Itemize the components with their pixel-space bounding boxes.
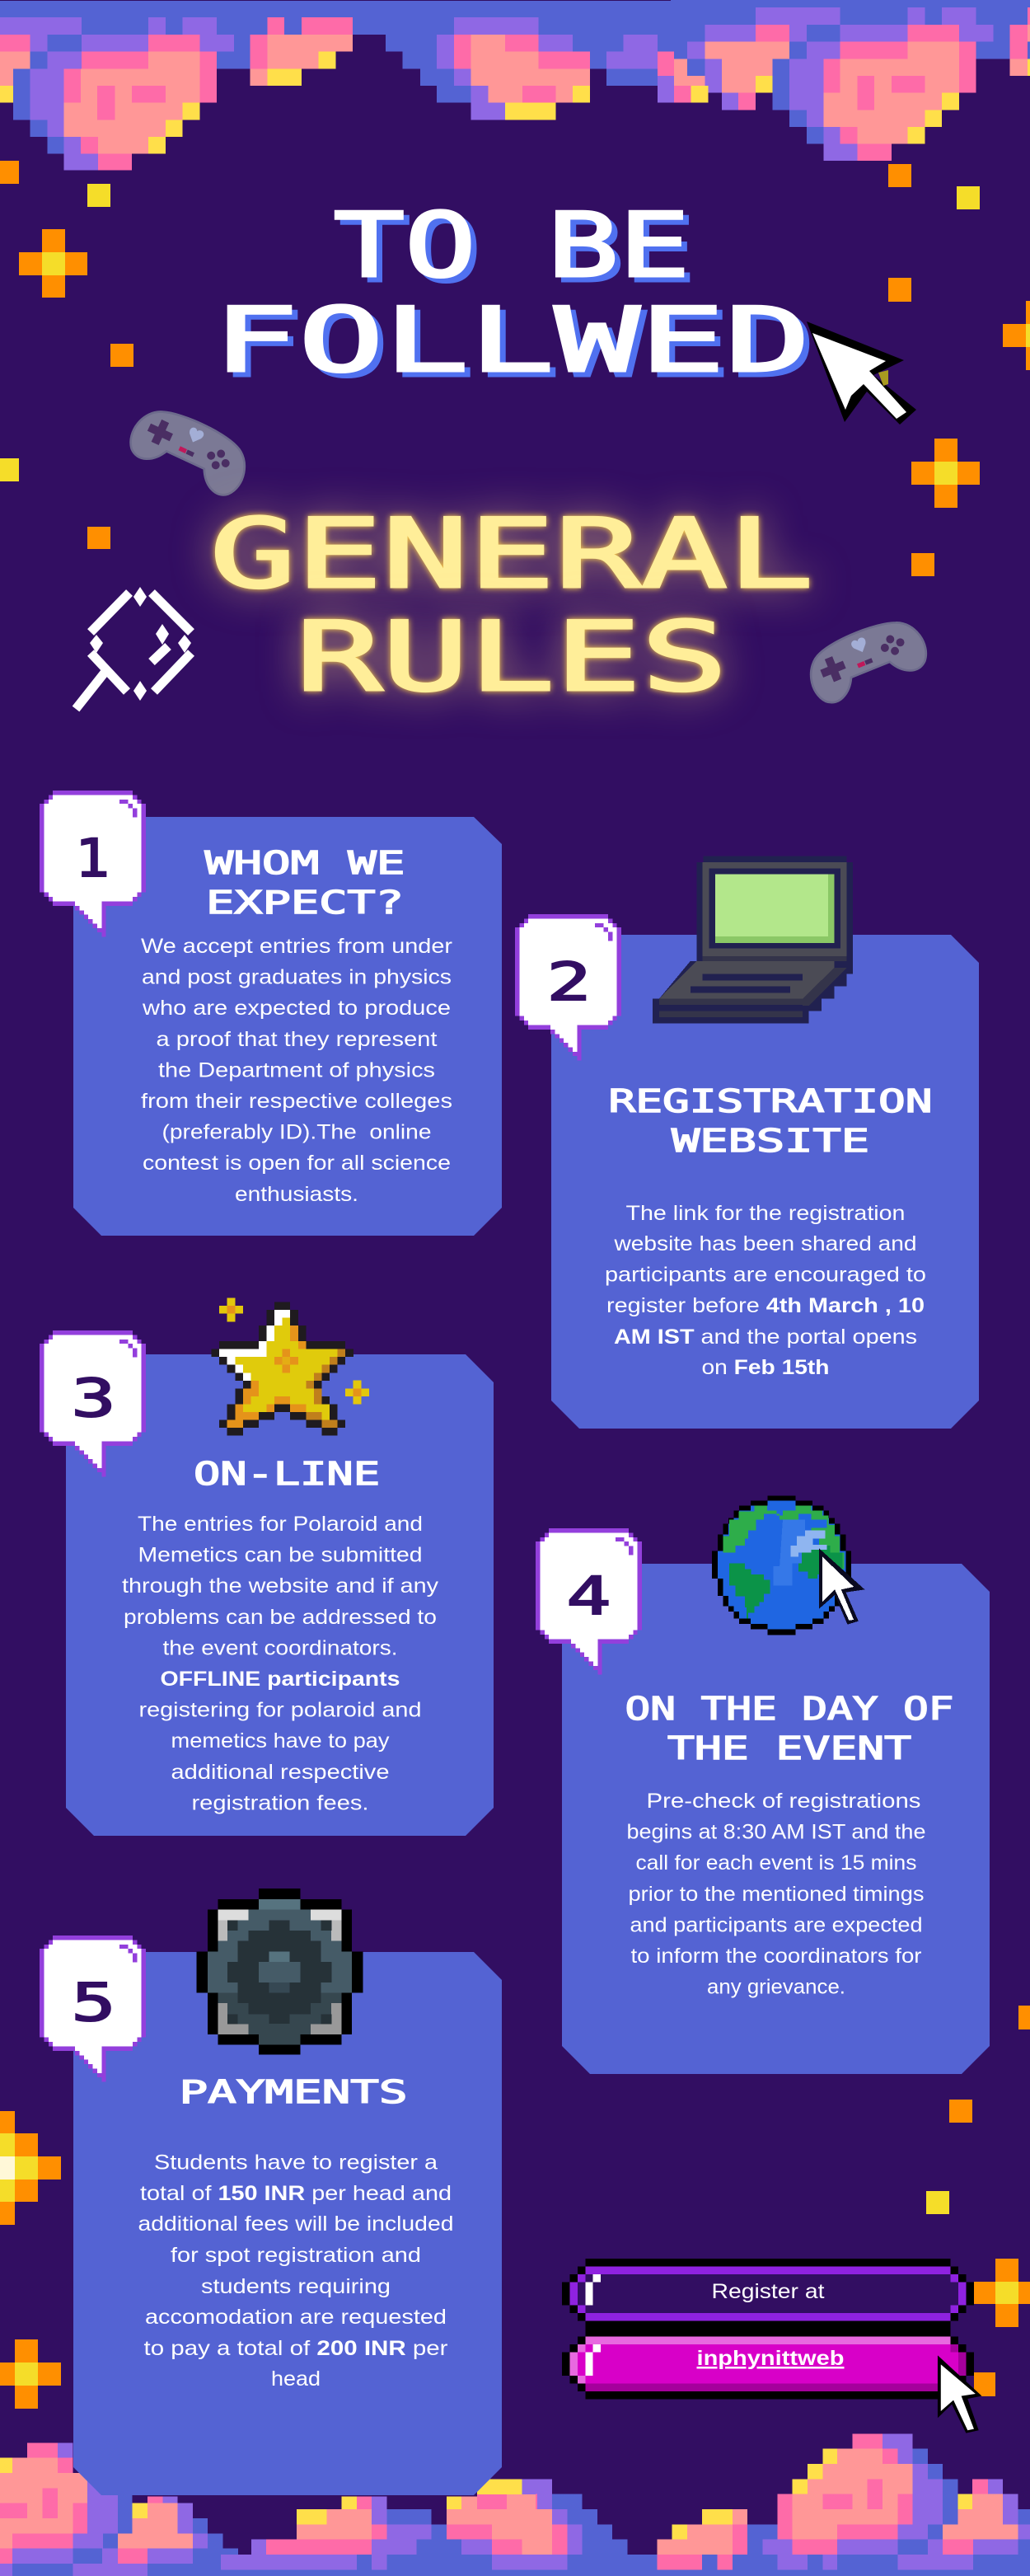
speech bubble number 2: 2 [547,952,592,1012]
body text: additional fees will be included [138,2212,453,2236]
body text: who are expected to produce [142,997,451,1020]
speech bubble number 3: 3 [71,1368,115,1429]
icon: game controller left [124,399,256,500]
body text: enthusiasts. [235,1183,358,1206]
title: to be followed: FOLLWED [213,289,811,392]
body text: on Feb 15th [702,1356,829,1379]
body text: We accept entries from under [141,935,452,958]
heading: general rules: RULES [296,602,728,713]
body text: for spot registration and [171,2244,421,2267]
icon: metal shield [197,1889,363,2055]
heading: REGISTRATION [608,1083,933,1120]
body text: a proof that they represent [157,1028,438,1051]
bottom pixel cloud border [0,2433,1030,2576]
body text: (preferably ID).The online [162,1121,432,1144]
body text: contest is open for all science [143,1152,451,1175]
body text: total of 150 INR per head and [140,2182,452,2205]
speech bubble number 4: 4 [567,1566,611,1626]
body text: to pay a total of 200 INR per [143,2337,448,2360]
heading: WEBSITE [672,1123,869,1160]
heading [608,1083,933,1160]
body text [138,2151,453,2391]
body text: call for each event is 15 mins [636,1851,916,1875]
body text: through the website and if any [122,1574,439,1598]
panel 5: payments [40,1889,502,2495]
body text: accomodation are requested [145,2306,447,2329]
heading [625,1691,954,1767]
body text: memetics have to pay [171,1729,390,1753]
body text: The entries for Polaroid and [138,1513,423,1536]
title: to be followed: TO BE [333,195,691,298]
panel 1: whom we expect [40,791,502,1236]
heading: ON-LINE [194,1456,380,1493]
body text: any grievance. [707,1976,845,1999]
heading: THE EVENT [667,1730,911,1767]
body text: website has been shared and [613,1232,916,1255]
icon: magnifier [76,587,191,709]
speech bubble number 1: 1 [75,828,110,889]
speech bubble number 3 [40,1330,146,1477]
body text [122,1513,439,1814]
body text: from their respective colleges [141,1090,452,1113]
body text: OFFLINE participants [160,1668,400,1691]
heading: general rules [209,499,814,713]
heading: EXPECT? [206,884,404,922]
body text: the Department of physics [158,1058,435,1082]
body text: additional respective [171,1761,389,1784]
body text: prior to the mentioned timings [628,1883,925,1906]
speech bubble number 5 [40,1936,146,2082]
body text: AM IST and the portal opens [614,1326,917,1349]
body text: Pre-check of registrations [646,1790,921,1813]
button: register at: Register at [712,2280,825,2303]
body text: to inform the coordinators for [631,1945,921,1968]
icon: game controller right [800,611,932,707]
speech bubble number 1 [40,791,146,937]
body text: Memetics can be submitted [138,1544,422,1567]
body text: participants are encouraged to [605,1264,926,1287]
icon: laptop [653,856,853,1024]
speech bubble number 2 [515,914,621,1061]
button: inphynittweb link: inphynittweb [697,2347,844,2370]
icon: button cursor [938,2355,982,2433]
body text: problems can be addressed to [124,1606,437,1629]
panel 2: registration website [515,856,979,1429]
panel 4: on the day of the event [536,1495,990,2074]
body text: Students have to register a [154,2151,438,2175]
body text [626,1790,926,1999]
body text: The link for the registration [626,1202,905,1225]
button: inphynittweb link [562,2336,974,2399]
speech bubble number 4 [536,1528,642,1675]
body text: begins at 8:30 AM IST and the [626,1821,926,1844]
button: register at [562,2259,974,2336]
body text: head [271,2367,321,2391]
heading: WHOM WE [204,845,405,882]
register buttons [562,2259,974,2399]
body text: register before 4th March , 10 [606,1294,925,1317]
body text [141,935,452,1206]
body text: registration fees. [191,1791,369,1814]
body text: the event coordinators. [163,1636,397,1659]
body text: registering for polaroid and [138,1699,422,1722]
heading: PAYMENTS [180,2074,407,2111]
icon: large pointer cursor [807,321,916,425]
body text: and participants are expected [630,1913,923,1936]
top pixel cloud border [0,0,1030,171]
panel 3: on-line [40,1297,494,1836]
speech bubble number 5: 5 [71,1973,115,2033]
icon: gold star with sparkles [212,1297,369,1436]
body text: students requiring [201,2275,391,2298]
icon: globe with cursor [712,1495,864,1635]
heading [204,845,405,922]
title: to be followed [213,195,811,392]
heading: general rules: GENERAL [209,499,814,610]
body text: and post graduates in physics [142,966,452,989]
heading: ON THE DAY OF [625,1691,954,1728]
body text [605,1202,926,1379]
